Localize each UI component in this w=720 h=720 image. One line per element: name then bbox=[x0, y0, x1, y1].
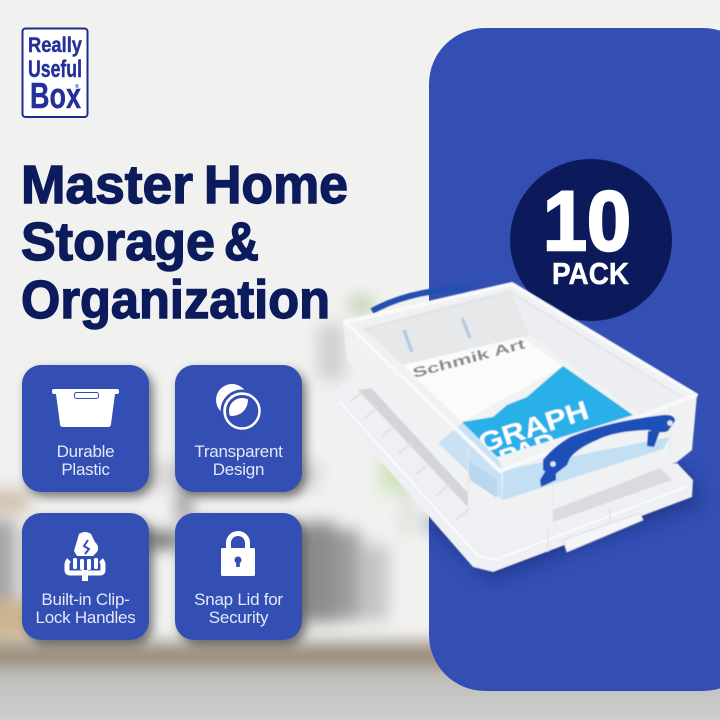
brand logo: Useful bbox=[28, 56, 82, 83]
10 pack badge: PACK bbox=[552, 256, 630, 291]
blue side panel bbox=[429, 28, 720, 691]
card: transparent design: Transparent bbox=[194, 442, 283, 461]
title: Organization bbox=[21, 270, 330, 330]
card: durable plastic: Durable bbox=[57, 442, 114, 461]
box rim bbox=[345, 284, 696, 471]
card: transparent design: Design bbox=[213, 460, 264, 479]
front handle bbox=[540, 415, 675, 487]
card: clip-lock handles: Lock Handles bbox=[35, 608, 136, 627]
card: durable plastic: Plastic bbox=[61, 460, 110, 479]
icon: overlapping circles bbox=[216, 384, 261, 430]
graph pad paper: Schmik Art bbox=[411, 335, 527, 381]
card: snap lid: Snap Lid for bbox=[194, 590, 283, 609]
icon: plastic tub bbox=[52, 389, 119, 427]
brand logo: Box bbox=[30, 75, 81, 116]
card: snap lid bbox=[175, 513, 302, 640]
icon: padlock bbox=[221, 531, 255, 576]
brand logo: ® bbox=[75, 83, 79, 90]
back handle bbox=[372, 288, 472, 311]
title: Storage bbox=[21, 212, 215, 272]
product: clear storage box with lid bbox=[340, 281, 703, 583]
graph pad paper: PAD bbox=[496, 427, 560, 473]
box body bbox=[343, 283, 697, 522]
icon: hand on clip handle bbox=[64, 532, 106, 581]
card: transparent design bbox=[175, 365, 302, 492]
product shadow bbox=[420, 470, 700, 580]
card: clip-lock handles: Built-in Clip- bbox=[41, 590, 130, 609]
10 pack badge: 10 bbox=[543, 174, 631, 268]
graph pad paper bbox=[403, 335, 670, 500]
card: durable plastic bbox=[22, 365, 149, 492]
card: clip-lock handles bbox=[22, 513, 149, 640]
title: Master bbox=[21, 155, 193, 215]
graph pad paper: GRAPH bbox=[475, 395, 592, 459]
lid bbox=[332, 383, 693, 572]
title: & bbox=[224, 212, 259, 272]
brand logo: Really bbox=[28, 34, 82, 57]
card: snap lid: Security bbox=[209, 608, 268, 627]
title: Home bbox=[204, 155, 348, 215]
